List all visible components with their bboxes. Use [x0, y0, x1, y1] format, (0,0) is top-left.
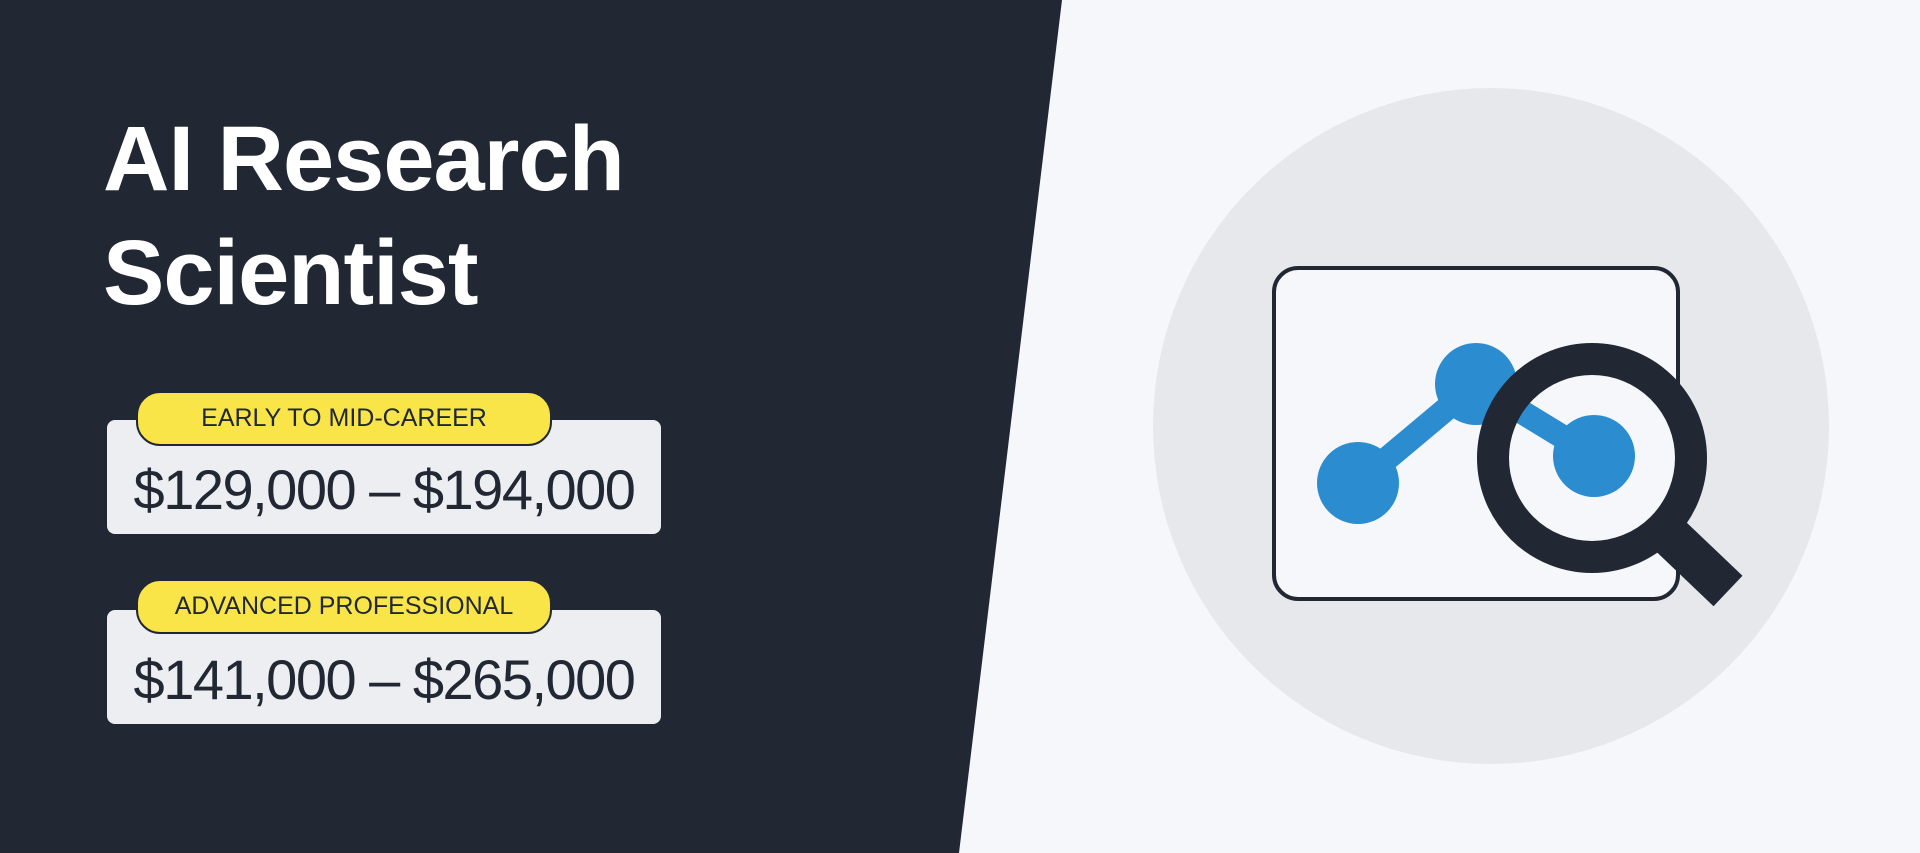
pill label: ADVANCED PROFESSIONAL	[175, 592, 513, 620]
salary card: early to mid-career	[107, 393, 661, 534]
card box	[107, 420, 661, 534]
pill label	[136, 391, 552, 446]
card box: $129,000 – $194,000	[134, 458, 634, 521]
title: Scientist	[103, 222, 477, 324]
background circle	[1153, 88, 1829, 764]
pill label	[136, 579, 552, 634]
pill label: EARLY TO MID-CAREER	[201, 404, 487, 432]
card box: $141,000 – $265,000	[134, 648, 634, 711]
illustration: chart with magnifier	[1153, 88, 1829, 764]
title	[103, 108, 624, 324]
card box	[107, 610, 661, 724]
line chart	[1317, 343, 1635, 524]
title: AI Research	[103, 108, 624, 210]
magnifier	[1493, 359, 1728, 591]
salary card: advanced professional	[107, 581, 661, 724]
chart frame	[1274, 268, 1678, 599]
